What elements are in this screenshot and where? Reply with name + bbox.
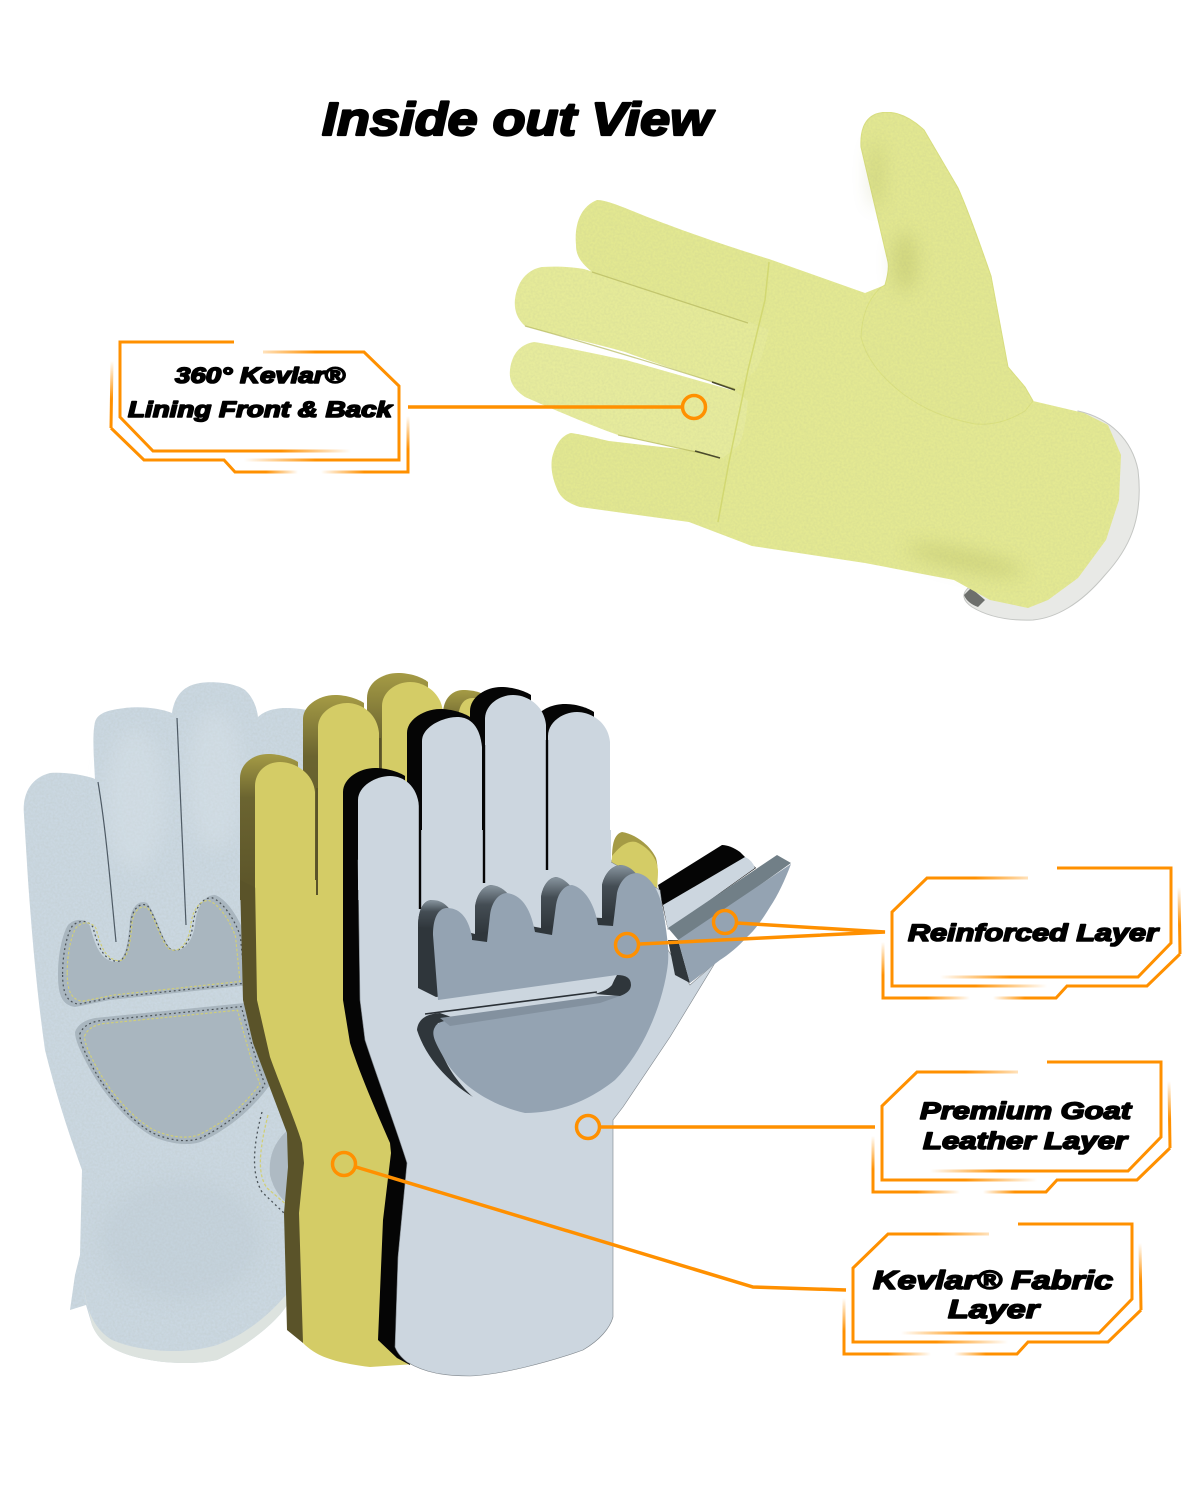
suede patch: thumb side bbox=[270, 1130, 288, 1204]
yellow finger 4 bbox=[443, 690, 490, 800]
ring: goat leather bbox=[576, 1116, 600, 1138]
finger seams bbox=[525, 272, 748, 455]
thumb patch face bbox=[678, 864, 791, 983]
finger 4 bbox=[552, 433, 729, 522]
finger 2 bbox=[515, 267, 769, 389]
patch bump caps bbox=[418, 865, 649, 934]
callout: 360 Kevlar lining bbox=[111, 342, 408, 472]
callout: Premium Goat Leather Layer bbox=[873, 1062, 1170, 1192]
thumb patch side strip bbox=[668, 855, 791, 942]
palm seam bbox=[718, 262, 769, 522]
slot edge line bbox=[425, 992, 597, 1014]
finger 1 bbox=[576, 200, 769, 323]
callout: Premium Goat Leather Layer: Premium Goat bbox=[920, 1098, 1132, 1125]
ring: reinforced finger patch bbox=[616, 934, 638, 956]
palm body bbox=[689, 259, 1121, 608]
cuff hem bbox=[84, 1290, 290, 1363]
palm top shading bbox=[440, 996, 620, 1026]
layered diagram: Kevlar fabric layer bbox=[240, 673, 658, 1367]
slot end shadow bbox=[595, 975, 631, 996]
title: Inside out View bbox=[322, 93, 716, 145]
palm patch dark sides bbox=[418, 865, 660, 997]
thumb black side bbox=[658, 845, 756, 930]
white body side bbox=[343, 900, 420, 1365]
finger gaps bbox=[695, 382, 735, 458]
thumb white face bbox=[663, 857, 755, 930]
callout: 360 Kevlar lining: Lining Front & Back bbox=[128, 397, 394, 422]
pointer: goat leather bbox=[600, 1125, 875, 1129]
cuff: dark hem tab bbox=[964, 588, 985, 607]
pointer: Kevlar fabric bbox=[356, 1167, 846, 1290]
yellow slits bbox=[317, 738, 380, 895]
white fingers fill bbox=[358, 830, 611, 890]
glove shading bbox=[870, 141, 1026, 582]
layered diagram: goat leather layer bbox=[343, 687, 756, 1376]
finger 3 bbox=[510, 342, 748, 458]
pointer: reinforced layer bbox=[640, 923, 885, 944]
callout: Kevlar Fabric Layer: Kevlar® Fabric bbox=[873, 1265, 1114, 1295]
suede patch: finger base bbox=[58, 895, 250, 1007]
yellow body face bbox=[255, 880, 445, 1367]
thumb patch dark side bbox=[668, 940, 690, 983]
leather body bbox=[24, 682, 320, 1363]
callout: Reinforced Layer bbox=[883, 868, 1180, 998]
finger separators bbox=[98, 718, 186, 942]
white finger 3 bbox=[470, 687, 531, 950]
leather highlights bbox=[100, 710, 260, 1300]
thumb panel bbox=[861, 112, 1033, 424]
pointer: Kevlar lining bbox=[408, 405, 682, 409]
stitching bbox=[63, 898, 288, 1214]
yellow body side bbox=[240, 880, 320, 1343]
white pinky bbox=[343, 768, 405, 950]
white slits bbox=[420, 740, 547, 909]
palm and finger patch face bbox=[433, 873, 668, 1113]
suede patch: palm bbox=[75, 1003, 270, 1144]
yellow pinky bbox=[240, 754, 298, 900]
photo: yellow Kevlar lining glove bbox=[510, 112, 1139, 620]
ring: Kevlar fabric bbox=[332, 1152, 356, 1176]
callout: Kevlar Fabric Layer bbox=[844, 1224, 1141, 1354]
ring: reinforced thumb patch bbox=[714, 910, 736, 934]
photo: leather glove palm bbox=[24, 682, 320, 1363]
yellow thumb tip bbox=[610, 832, 658, 890]
callout: 360 Kevlar lining: 360° Kevlar® bbox=[175, 363, 346, 388]
cuff: white hem bbox=[964, 411, 1139, 620]
callout: Kevlar Fabric Layer: Layer bbox=[948, 1294, 1041, 1324]
white finger 2 bbox=[407, 709, 470, 950]
white body face bbox=[358, 860, 715, 1376]
yellow finger 3 bbox=[367, 673, 428, 900]
layered diagram: reinforced layer bbox=[417, 855, 791, 1113]
yellow finger 2 bbox=[303, 695, 364, 900]
white finger 4 bbox=[533, 704, 594, 950]
callout: Premium Goat Leather Layer: Leather Layer bbox=[923, 1128, 1129, 1155]
ring: Kevlar lining bbox=[682, 396, 706, 418]
pointers and rings bbox=[332, 396, 885, 1290]
callout: Reinforced Layer: Reinforced Layer bbox=[908, 920, 1160, 947]
